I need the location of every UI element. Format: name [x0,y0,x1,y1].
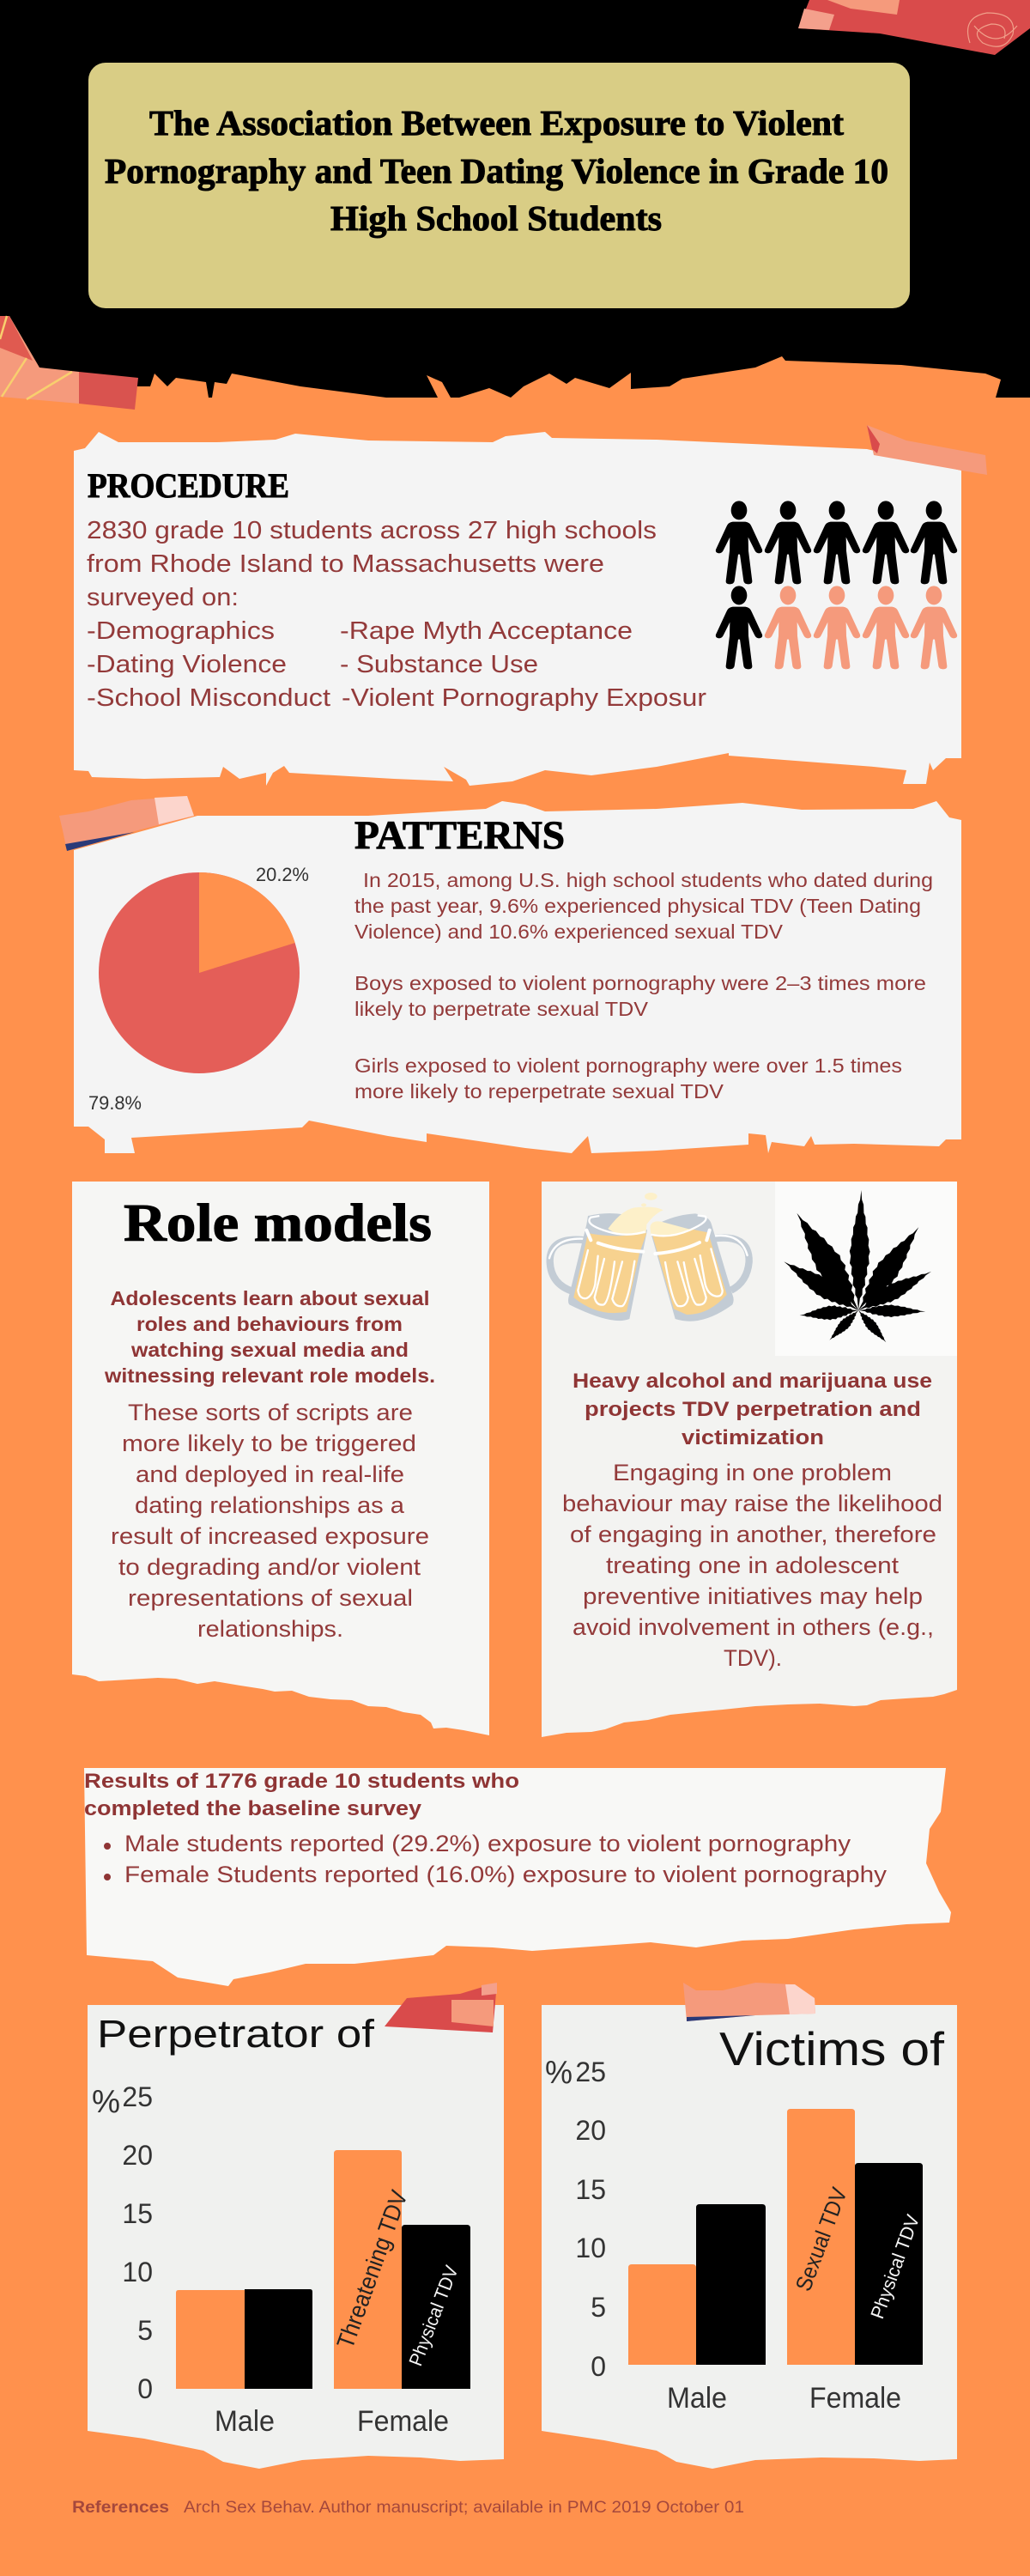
procedure text: 2830 grade 10 students across 27 high schools [87,517,657,544]
patterns text [354,869,933,1103]
left mug [549,1193,663,1321]
results bullets: Male students reported (29.2%) exposure to violent pornography [124,1831,851,1856]
title text [105,103,888,238]
y axis labels: 10 [575,2233,606,2263]
percent sign: % [92,2084,120,2120]
role models heading: Role models [124,1194,432,1253]
x axis labels [667,2382,901,2415]
y axis labels [575,2057,606,2382]
procedure heading: PROCEDURE [88,466,289,505]
role models body text: result of increased exposure [111,1523,429,1549]
title banner [88,63,910,308]
role models body text: representations of sexual [128,1585,413,1611]
y axis labels: 25 [122,2081,153,2112]
y axis labels: 25 [575,2057,606,2087]
alcohol bold text: projects TDV perpetration and [585,1398,921,1421]
pie chart [88,864,309,1114]
procedure text: surveyed on: [87,584,239,611]
x axis labels [215,2405,449,2438]
percent sign: % [545,2055,573,2091]
y axis labels [122,2081,153,2404]
bars [176,2150,470,2389]
x axis labels: Male [215,2405,275,2438]
alcohol body text: preventive initiatives may help [583,1583,923,1609]
panel: patterns [59,796,961,1153]
icon: people pictogram [716,501,957,669]
role models bold text: witnessing relevant role models. [104,1364,435,1387]
alcohol body text [562,1460,942,1671]
y axis labels: 10 [122,2257,153,2287]
role models body text: relationships. [197,1616,343,1642]
title text: The Association Between Exposure to Violent [149,103,844,143]
bar label: sexual TDV: Sexual TDV [791,2184,852,2294]
bar label: threatening TDV: Threatening TDV [331,2187,413,2352]
patterns text: Girls exposed to violent pornography were over 1.5 times [354,1054,902,1077]
panel: results [84,1768,951,1986]
results heading: completed the baseline survey [84,1797,422,1820]
procedure text: -Demographics [87,617,275,645]
patterns text: Boys exposed to violent pornography were 2–3 times more [354,972,926,994]
procedure text: -Rape Myth Acceptance [340,617,633,645]
procedure text: -Violent Pornography Exposur [342,684,706,712]
bar label: physical TDV: Physical TDV [866,2212,924,2322]
y axis labels: 5 [591,2292,606,2323]
y axis labels: 0 [137,2373,153,2404]
chart title: Victims of [719,2022,945,2075]
panel: alcohol and marijuana [542,1182,957,1737]
pie label 20.2%: 20.2% [256,864,309,885]
alcohol bold text [573,1370,932,1449]
role models body text: and deployed in real-life [136,1461,404,1487]
role models bold text: watching sexual media and [130,1339,409,1361]
results heading [84,1770,519,1820]
role models body text: These sorts of scripts are [128,1400,413,1425]
alcohol bold text: Heavy alcohol and marijuana use [573,1370,932,1393]
panel: perpetrator chart [88,2005,504,2469]
patterns text: In 2015, among U.S. high school students who dated during [363,869,933,891]
procedure text: -School Misconduct [87,684,330,712]
role models body text: dating relationships as a [135,1492,405,1518]
title text: Pornography and Teen Dating Violence in Grade 10 [105,151,888,191]
alcohol body text: TDV). [724,1645,782,1671]
results bullets: Female Students reported (16.0%) exposure to violent pornography [124,1862,888,1887]
panel: victims chart [542,2005,957,2469]
y axis labels: 15 [575,2174,606,2205]
y axis labels: 15 [122,2198,153,2229]
tape: victims chart [683,1983,815,2021]
patterns text: the past year, 9.6% experienced physical TDV (Teen Dating [354,895,921,917]
role models bold text: Adolescents learn about sexual [110,1287,429,1309]
x axis labels: Male [667,2382,727,2415]
procedure text: -Dating Violence [87,651,287,678]
role models body text: more likely to be triggered [122,1431,416,1456]
alcohol body text: treating one in adolescent [606,1552,900,1578]
y axis labels: 0 [591,2351,606,2382]
y axis labels: 20 [575,2115,606,2146]
tape: top right [798,0,1030,55]
icon: marijuana leaf [779,1190,936,1346]
x axis labels: Female [357,2405,449,2438]
alcohol body text: Engaging in one problem [613,1460,892,1485]
alcohol body text: avoid involvement in others (e.g., [573,1614,934,1640]
white backing behind leaf [775,1182,957,1356]
results bullets [104,1831,888,1887]
tape: perpetrator chart [385,1983,497,2032]
procedure text: - Substance Use [340,651,538,678]
patterns text: Violence) and 10.6% experienced sexual TDV [354,920,784,943]
references: Arch Sex Behav. Author manuscript; available in PMC 2019 October 01 [184,2499,744,2517]
patterns tape [59,796,194,851]
results heading: Results of 1776 grade 10 students who [84,1770,519,1793]
alcohol body text: of engaging in another, therefore [570,1522,936,1547]
bars [628,2109,923,2365]
x axis labels: Female [809,2382,901,2415]
y axis labels: 20 [122,2140,153,2171]
pie label 79.8%: 79.8% [88,1092,142,1114]
alcohol body text: behaviour may raise the likelihood [562,1491,942,1516]
role models bold text: roles and behaviours from [136,1313,403,1335]
role models body text: to degrading and/or violent [118,1554,421,1580]
role models body text [111,1400,429,1642]
procedure text [87,517,706,712]
patterns heading: PATTERNS [354,813,565,858]
black torn header band [0,0,1030,398]
panel: procedure [74,425,987,786]
role models bold text [104,1287,435,1387]
procedure text: from Rhode Island to Massachusetts were [87,550,604,578]
bar label: physical TDV: Physical TDV [404,2263,463,2369]
title text: High School Students [330,198,662,238]
patterns text: likely to perpetrate sexual TDV [354,998,649,1020]
chart title: Perpetrator of [97,2012,375,2056]
alcohol bold text: victimization [682,1426,824,1449]
y axis labels: 5 [137,2315,153,2346]
right mug [650,1213,749,1321]
panel: role models [72,1182,489,1735]
icon: beer mugs [549,1193,749,1321]
tape: left under header [0,316,138,410]
patterns text: more likely to reperpetrate sexual TDV [354,1080,724,1103]
references: References [72,2499,169,2517]
procedure tape [867,425,987,475]
